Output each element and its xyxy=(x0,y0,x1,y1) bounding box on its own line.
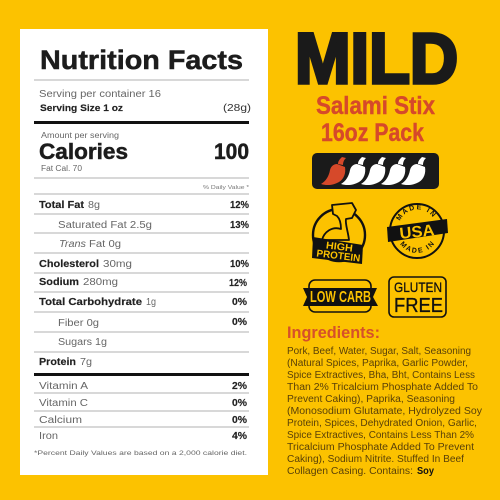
heading: Nutrition Facts: Nutrition Facts xyxy=(40,45,243,75)
badge: low carb xyxy=(303,280,378,312)
daily value header: % Daily Value * xyxy=(203,185,250,191)
row: vitamin C xyxy=(39,398,247,409)
row: vitamin A: Vitamin A xyxy=(39,381,88,392)
row: vitamin C: Vitamin C xyxy=(39,398,88,409)
row: saturated fat xyxy=(58,220,249,231)
row: sodium: Sodium xyxy=(39,277,79,288)
row: protein xyxy=(39,357,92,368)
calories: Calories xyxy=(39,139,128,164)
badge: high protein xyxy=(312,203,365,265)
text block: ingredients list: Than 2% Tricalcium Phosphate Added To xyxy=(287,382,478,393)
text block: ingredients list: Caking), Sodium Nitrite. Stuffed In Beef xyxy=(287,454,464,465)
badge: high protein: PROTEIN xyxy=(316,248,361,265)
text block: ingredients list: Tricalcium Phosphate Added To Prevent xyxy=(287,442,474,453)
title: MILD: MILD xyxy=(295,20,458,99)
row: vitamin A xyxy=(39,381,247,392)
row: vitamin C: 0% xyxy=(232,398,247,409)
row: total carbohydrate: Total Carbohydrate xyxy=(39,297,142,308)
subtitle: Salami Stix 16oz Pack: 16oz Pack xyxy=(321,119,424,147)
calories xyxy=(39,139,249,164)
panel: nutrition facts xyxy=(20,29,268,475)
icon: white chili 4 xyxy=(381,157,406,185)
text block: ingredients list: Soy xyxy=(417,466,434,477)
row: total carbohydrate xyxy=(39,297,247,308)
icon: flexed arm xyxy=(322,203,356,240)
row: total fat: 12% xyxy=(230,200,249,211)
badge: high protein: HIGH xyxy=(325,240,353,255)
row: fiber: 0% xyxy=(232,317,247,328)
badge: gluten free: FREE xyxy=(394,295,443,317)
row: protein: 7g xyxy=(80,357,92,368)
row: calcium: 0% xyxy=(232,415,247,426)
row: calcium xyxy=(39,415,247,426)
row: trans fat xyxy=(59,239,121,250)
badge: low carb: LOW CARB xyxy=(310,289,371,306)
row: total fat xyxy=(39,200,249,211)
servings per container: Serving per container 16 xyxy=(39,89,161,100)
badge: gluten free xyxy=(389,277,446,317)
row: sodium: 280mg xyxy=(83,277,118,288)
row: saturated fat: 13% xyxy=(230,220,249,231)
row: iron: 4% xyxy=(232,431,247,442)
row: fiber: Fiber 0g xyxy=(58,318,99,329)
row: total fat: Total Fat xyxy=(39,200,85,211)
row: iron: Iron xyxy=(39,431,58,442)
icon: white chili 2 xyxy=(341,157,366,185)
row: cholesterol: 10% xyxy=(230,259,249,270)
row: total carbohydrate: 1g xyxy=(146,297,156,308)
row: total fat: 8g xyxy=(88,200,100,211)
text block: ingredients list: Pork, Beef, Water, Sugar, Salt, Seasoning xyxy=(287,346,471,357)
serving size: (28g) xyxy=(223,103,251,114)
footnote: *Percent Daily Values are based on a 2,000 calorie diet. xyxy=(34,450,247,457)
row: sodium: 12% xyxy=(229,278,247,289)
text block: ingredients list: Prevent Caking), Paprika, Seasoning xyxy=(287,394,455,405)
badge: made in USA: MADE IN xyxy=(400,241,434,253)
row: total carbohydrate: 0% xyxy=(232,297,247,308)
row: sodium xyxy=(39,277,247,289)
row: cholesterol: 30mg xyxy=(103,259,132,270)
fat calories: Fat Cal. 70 xyxy=(41,164,83,173)
text block: ingredients list: Collagen Casing. Contains: xyxy=(287,466,413,477)
badge: made in USA: USA xyxy=(399,222,436,243)
icon: white chili 5 xyxy=(401,157,426,185)
row: iron xyxy=(39,431,247,442)
row: fiber xyxy=(58,317,247,329)
row: saturated fat: Saturated Fat 2.5g xyxy=(58,220,152,231)
serving size: Serving Size 1 oz xyxy=(40,103,123,114)
icon: white chili 3 xyxy=(361,157,386,185)
row: vitamin A: 2% xyxy=(232,381,247,392)
row: cholesterol: Cholesterol xyxy=(39,259,99,270)
text block: ingredients list: (Natural Spices, Paprika, Garlic Powder, xyxy=(287,358,468,369)
icon: red chili xyxy=(321,157,346,185)
row: trans fat: Trans xyxy=(59,239,86,250)
row: sugars: Sugars 1g xyxy=(58,337,107,348)
badge: gluten free: GLUTEN xyxy=(394,279,442,295)
calories: 100 xyxy=(214,139,249,164)
text block: ingredients list: (Monosodium Glutamate, Hydrolyzed Soy xyxy=(287,406,482,417)
row: cholesterol xyxy=(39,259,249,270)
amount per serving: Amount per serving xyxy=(41,131,119,140)
heat meter: one of five chilies xyxy=(312,153,439,189)
subtitle: Salami Stix 16oz Pack xyxy=(316,92,435,147)
text block: ingredients list: Spice Extractives, Contains Less Than 2% xyxy=(287,430,474,441)
text block: ingredients list: Protein, Spices, Dehydrated Onion, Garlic, xyxy=(287,418,477,429)
row: protein: Protein xyxy=(39,357,76,368)
serving size xyxy=(40,103,251,114)
badge: made in USA xyxy=(387,203,448,259)
subtitle: Salami Stix 16oz Pack: Salami Stix xyxy=(316,92,435,120)
row: calcium: Calcium xyxy=(39,415,82,426)
text block: ingredients list: Spice Extractives, Bha, Bht, Contains Less xyxy=(287,370,475,381)
badge: made in USA: MADE IN xyxy=(396,205,436,220)
row: trans fat: Fat 0g xyxy=(89,239,121,250)
text block: ingredients list xyxy=(287,346,482,477)
heading: Ingredients: Ingredients: xyxy=(287,324,380,342)
